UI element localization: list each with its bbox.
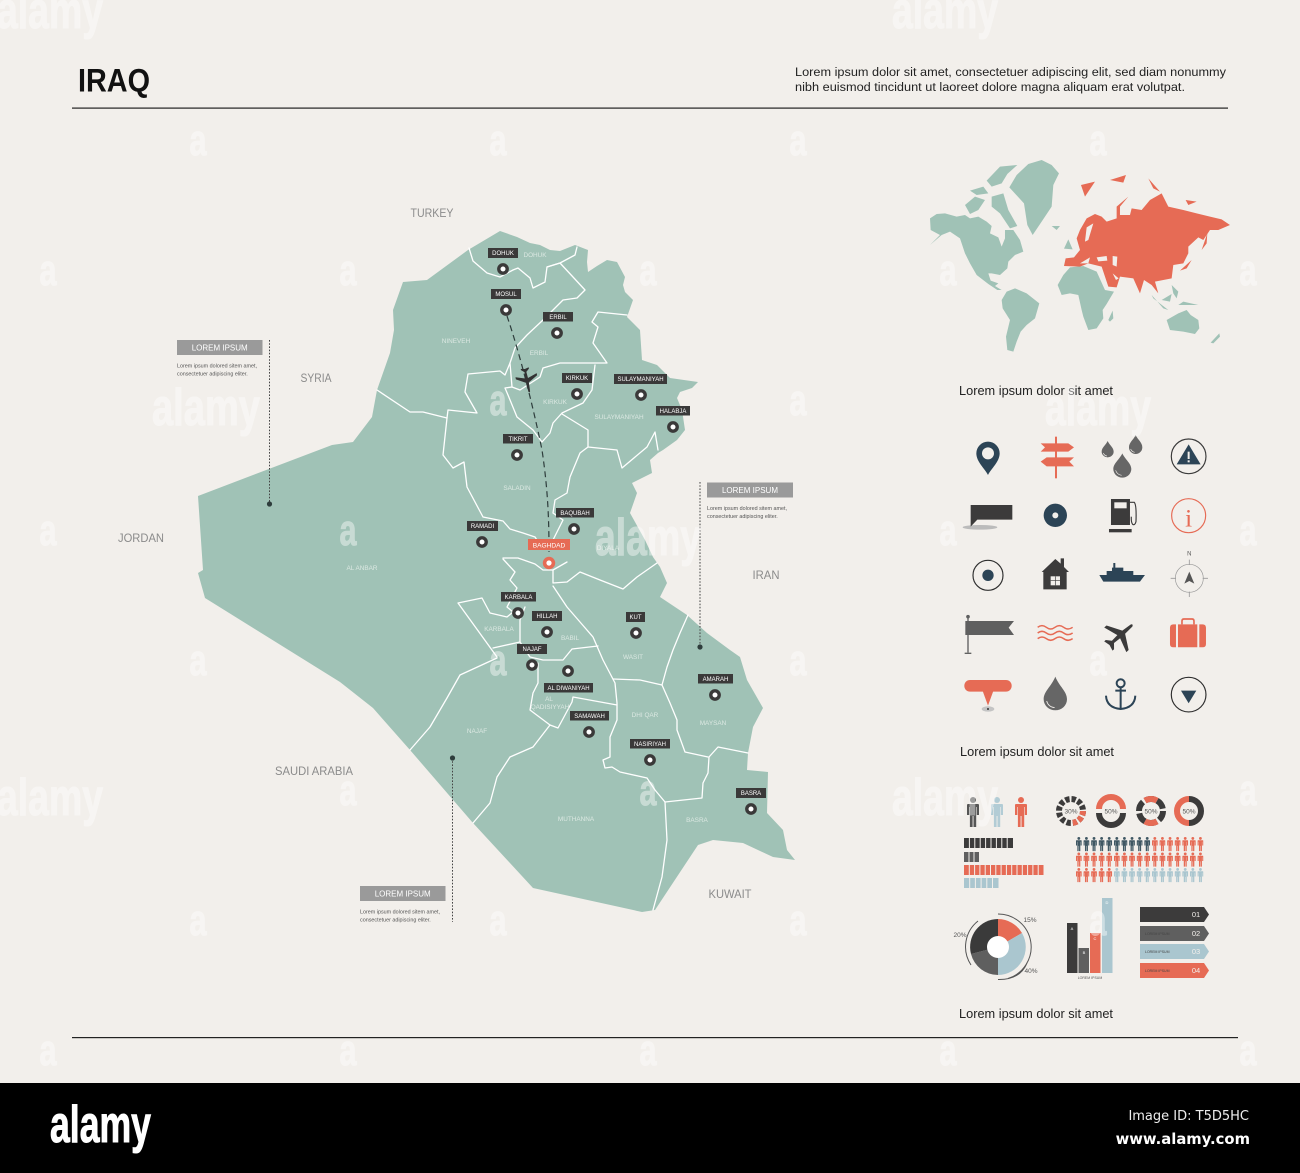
watermarks: alamy [0,769,103,827]
indonesia [1152,285,1198,310]
watermarks: alamy [1045,379,1151,437]
icon: map pin [976,442,1000,475]
neighbouring country labels: SYRIA [300,371,332,385]
callout: east: LOREM IPSUM [722,486,778,495]
icon: fuel pump [1109,499,1136,532]
callout: west: Lorem ipsum dolored sitem amet, [177,364,257,370]
canadian arctic islands [965,165,1017,228]
watermarks: a [190,116,207,165]
chart: ring 4 [1177,799,1201,823]
intro text [795,65,1227,94]
callout: south: Lorem ipsum dolored sitem amet, [360,910,440,916]
africa [1058,266,1114,330]
chart: pie: 40% [1024,968,1038,975]
chart: arrow list: LOREM IPSUM [1145,950,1170,954]
world map [930,160,1230,352]
icon: speech bubble [963,505,1012,530]
title: IRAQ [78,62,150,98]
pin: Nasiriyah: NASIRIYAH [634,742,666,748]
pin: Karbala: KARBALA [505,595,532,601]
pin: Basra: BASRA [741,791,761,797]
caption: world map: Lorem ipsum dolor sit amet [959,384,1114,398]
australia [1167,310,1199,334]
icon: house [1042,558,1069,589]
pin: Tikrit [503,434,533,459]
chart: bars [1067,898,1112,980]
watermarks: a [490,116,507,165]
icon: waves [1038,626,1073,640]
pin: Hillah: HILLAH [536,614,558,620]
image id: Image ID: T5D5HC [1128,1109,1249,1124]
province borders [377,247,748,910]
icon: ship [1099,563,1145,582]
icon: target [973,560,1003,590]
province names: SALADIN [503,485,531,492]
province names: BABIL [561,635,580,642]
province names: MAYSAN [700,720,727,727]
icon: compass: N [1187,552,1191,558]
watermarks: a [340,246,357,295]
watermarks: a [1090,116,1107,165]
callout: east: Lorem ipsum dolored sitem amet, [707,506,787,512]
neighbouring country labels: JORDAN [118,531,164,545]
pin: Baghdad capital: BAGHDAD [533,542,566,550]
icon: flag [965,615,1014,654]
eurasia [1064,193,1230,293]
chart: pie [953,914,1038,980]
pin: Hillah [532,611,562,636]
pin: Kut [626,612,645,637]
province names: AL [545,696,553,703]
footer bar [0,1083,1300,1173]
chart: arrow list: LOREM IPSUM [1145,969,1170,973]
pin: Karbala [501,592,536,617]
watermarks: a [490,636,507,685]
intro text: nibh euismod tincidunt ut laoreet dolore magna aliquam erat volutpat. [795,80,1185,94]
pin: Samawah [570,711,609,736]
chart: segmented bars [964,838,1044,888]
chart: bars: D [1106,900,1109,905]
icon: callout pin [964,680,1012,712]
province names: DIYALA [597,545,620,552]
pin: Kut: KUT [630,615,642,621]
icon: info: i [1185,504,1192,532]
chart: people grid [1076,837,1203,882]
chart: bars: LOREM IPSUM [1078,976,1102,980]
watermarks: a [790,116,807,165]
callout: east: consectetuer adipiscing eliter. [707,514,778,520]
chart: ring 1: 30% [1064,808,1078,816]
pin: Sulaymaniyah: SULAYMANIYAH [617,377,664,383]
pin: Najaf: NAJAF [522,647,542,653]
icon: disc [1044,504,1067,527]
chart: ring 2 [1099,797,1123,825]
pin: Al Diwaniyah: AL DIWANIYAH [547,686,590,692]
callout: south [360,755,455,924]
watermarks: a [40,506,57,555]
pin: Mosul [491,289,521,314]
province names: KARBALA [484,626,514,633]
site address: www.alamy.com [1116,1131,1250,1148]
chart: bars: B [1083,950,1086,955]
watermarks: a [790,896,807,945]
caption: charts: Lorem ipsum dolor sit amet [959,1007,1114,1021]
watermarks: a [940,1026,957,1075]
flight route [507,316,549,552]
footer logo: alamy [50,1096,151,1154]
watermarks: a [790,376,807,425]
greenland [1009,160,1059,235]
province names: AL ANBAR [346,565,378,572]
province names: NAJAF [467,728,487,735]
pin: Amarah: AMARAH [703,677,728,683]
watermarks: a [1240,1026,1257,1075]
pin: Erbil [543,312,573,337]
callout: west [177,340,272,507]
province names [346,252,727,824]
watermarks: a [940,506,957,555]
pin: Sulaymaniyah [614,374,667,399]
chart: ring 3: 50% [1144,808,1158,816]
neighbouring country labels [118,206,780,901]
pin: Baghdad capital [528,539,570,567]
icon: compass [1171,552,1208,597]
madagascar, iceland, uk, new zealand [1052,226,1220,343]
callout: south: LOREM IPSUM [375,890,431,898]
chart: ring 1 [1059,799,1083,823]
icon: warning [1171,439,1206,474]
icon: airplane [1097,612,1143,658]
chart: pie: 20% [953,932,967,939]
chart: pie: 15% [1023,917,1037,924]
pin: Kirkuk: KIRKUK [566,376,588,382]
callout: east [697,482,793,650]
watermarks: a [490,376,507,425]
chart: arrow list [1140,907,1209,978]
watermarks: a [1240,506,1257,555]
chart: ring 3 [1139,799,1163,823]
icon: oil drop [1044,677,1067,710]
pin: Erbil: ERBIL [549,315,567,321]
chart: arrow list: 04 [1192,966,1200,975]
icon: suitcase [1170,619,1206,647]
pin: Ramadi [467,521,498,546]
arctic and pacific islands [1081,175,1207,271]
icon set [963,435,1208,712]
neighbouring country labels: SAUDI ARABIA [275,764,353,778]
chart: bars: A [1071,926,1074,931]
pin: Baqubah [556,508,594,533]
watermarks: a [340,766,357,815]
intro text: Lorem ipsum dolor sit amet, consectetuer adipiscing elit, sed diam nonummy [795,65,1227,79]
province names: DOHUK [523,252,547,259]
icon: down triangle [1171,677,1206,712]
chart: three persons [967,797,1027,827]
chart: ring 4: 50% [1182,808,1196,816]
chart: arrow list: 03 [1192,947,1200,956]
watermarks: a [40,1026,57,1075]
caption: icons: Lorem ipsum dolor sit amet [960,745,1115,759]
watermarks: a [1240,766,1257,815]
province names: NINEVEH [442,338,471,345]
watermarks: a [1240,246,1257,295]
watermarks: a [340,506,357,555]
callout: west: LOREM IPSUM [192,344,248,352]
icon: signpost [1041,437,1074,478]
watermarks: a [790,636,807,685]
pin: Halabja [656,406,690,431]
south america [1002,288,1039,352]
chart: arrow list: 01 [1192,910,1200,919]
chart: arrow list: 02 [1192,929,1200,938]
north america [930,213,1023,290]
chart: ring 2: 50% [1104,808,1118,816]
watermarks: a [1090,896,1107,945]
icon: plane on route [514,366,540,394]
pin: Al Diwaniyah [544,667,593,692]
watermarks: alamy [892,769,998,827]
watermarks: a [640,766,657,815]
pin: Basra [736,788,766,813]
watermarks: alamy [595,509,701,567]
watermarks: alamy [152,379,260,437]
watermarks: a [340,1026,357,1075]
province names: ERBIL [530,350,549,357]
watermarks: a [190,636,207,685]
watermarks: a [1090,636,1107,685]
country outline [198,231,795,912]
watermarks: a [940,246,957,295]
neighbouring country labels: TURKEY [410,206,454,220]
province names: BASRA [686,817,709,824]
pin: Kirkuk [562,373,592,398]
watermarks: a [640,246,657,295]
chart: bars: C [1094,936,1097,941]
pin: Samawah: SAMAWAH [574,714,605,720]
map: Iraq [198,231,795,912]
chart: arrow list: LOREM IPSUM [1145,932,1170,936]
watermarks: a [190,896,207,945]
pin: Nasiriyah [630,739,670,764]
seas: black sea, caspian, baltic, mediterranean cut-outs [1080,223,1119,280]
pin: Dohuk [488,248,518,273]
province names: DHI QAR [632,712,659,719]
province names: QADISIYYAH [531,704,570,711]
pin: Halabja: HALABJA [660,409,686,415]
icon: info [1172,499,1206,533]
callout: south: consectetuer adipiscing eliter. [360,918,431,924]
watermarks: a [40,246,57,295]
callout: west: consectetuer adipiscing eliter. [177,372,248,378]
watermarks: a [640,1026,657,1075]
province names: WASIT [623,654,643,661]
province names: SULAYMANIYAH [594,414,644,421]
pin: Mosul: MOSUL [495,292,517,298]
icon: anchor [1106,679,1135,709]
pin: Dohuk: DOHUK [492,251,514,257]
pin: Ramadi: RAMADI [471,524,494,530]
neighbouring country labels: KUWAIT [708,887,752,901]
pin: Baqubah: BAQUBAH [560,511,590,517]
pin: Tikrit: TIKRIT [508,437,528,443]
neighbouring country labels: IRAN [752,568,780,582]
pin: Amarah [698,674,733,699]
province names: KIRKUK [543,399,568,406]
pin: Najaf [517,644,547,669]
watermarks: a [490,896,507,945]
icon: water drops [1102,435,1142,478]
province names: MUTHANNA [558,816,595,823]
